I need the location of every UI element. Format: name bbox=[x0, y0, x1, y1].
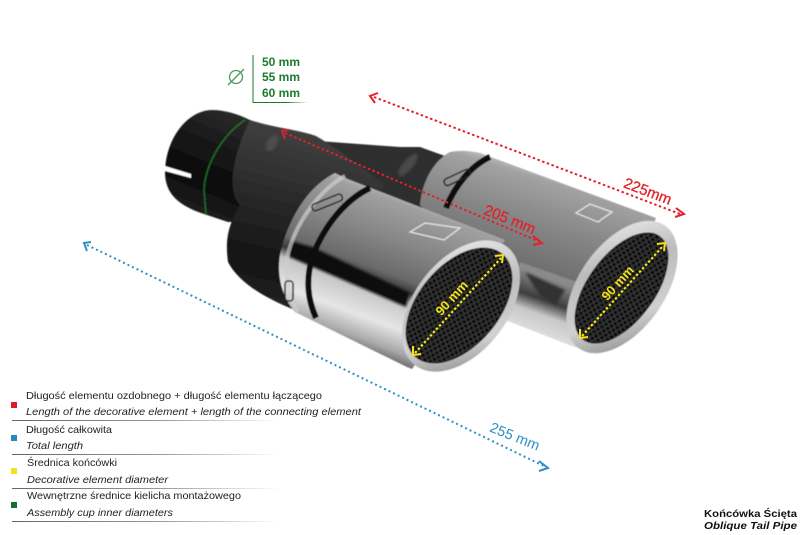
right cylinder lower section bbox=[505, 262, 600, 348]
legend: blue item: Total length bbox=[26, 440, 83, 452]
legend: yellow item: Średnica końcówki bbox=[27, 456, 117, 469]
diameter values: 60 mm bbox=[262, 88, 300, 100]
yellow arrow: right tip 90 mm bbox=[580, 243, 665, 338]
black inlet pipe bbox=[165, 110, 300, 222]
diameter values: 55 mm bbox=[262, 72, 300, 84]
left cylinder dark reflection band bbox=[288, 241, 410, 307]
product type caption: Oblique Tail Pipe bbox=[704, 520, 797, 532]
embossed logos bbox=[410, 204, 612, 240]
Y junction body bbox=[227, 120, 385, 310]
green inlet diameter callout bbox=[228, 55, 308, 102]
callout bracket bbox=[253, 55, 308, 102]
exhaust tail pipe product illustration bbox=[165, 110, 700, 394]
red arrow: 205 mm bbox=[282, 130, 542, 245]
legend: red item: Length of the decorative element + length of the connecting element bbox=[26, 406, 362, 418]
right tail cylinder bbox=[420, 151, 656, 345]
left tip rim bbox=[378, 218, 544, 394]
diameter symbol bbox=[228, 69, 244, 85]
right tip perforated insert bbox=[557, 217, 686, 359]
left tip perforated insert bbox=[385, 228, 533, 383]
legend: blue item bbox=[11, 424, 280, 455]
inlet pipe slot bbox=[165, 166, 191, 178]
legend: red item bbox=[11, 390, 362, 421]
yellow arrow: right tip 90 mm: 90 mm bbox=[598, 263, 637, 303]
legend bbox=[11, 390, 362, 522]
right cylinder black ring bbox=[446, 157, 490, 208]
brand badges on cylinders bbox=[285, 168, 471, 301]
yellow arrow: left tip 90 mm bbox=[413, 255, 503, 355]
diameter values: 50 mm bbox=[262, 57, 300, 69]
left cylinder light ring band bbox=[287, 176, 345, 312]
product type caption: Końcówka Ścięta bbox=[704, 507, 797, 520]
diameter values bbox=[262, 57, 300, 100]
left tail cylinder bbox=[279, 173, 505, 369]
blue arrow: 255 mm bbox=[84, 242, 548, 471]
red arrow: 205 mm: 205 mm bbox=[481, 202, 538, 238]
legend: green item: Wewnętrzne średnice kielicha montażowego bbox=[27, 490, 241, 502]
left cylinder black ring bbox=[308, 188, 370, 318]
right cylinder dark reflection bbox=[525, 272, 565, 305]
right tip rim bbox=[544, 201, 700, 373]
rear connecting tube bbox=[318, 141, 480, 240]
legend: blue item: Długość całkowita bbox=[26, 424, 112, 436]
legend: green item: Assembly cup inner diameters bbox=[26, 507, 174, 519]
blue arrow: 255 mm: 255 mm bbox=[487, 420, 542, 455]
legend: yellow item: Decorative element diameter bbox=[27, 474, 169, 486]
green diameter band on pipe bbox=[204, 120, 245, 215]
yellow arrow: left tip 90 mm: 90 mm bbox=[432, 278, 471, 318]
legend: red item: Długość elementu ozdobnego + długość elementu łączącego bbox=[26, 390, 322, 402]
legend: yellow item bbox=[11, 456, 280, 489]
weld texture on junction bbox=[263, 133, 421, 179]
product type caption bbox=[704, 507, 797, 532]
red arrow: 225mm: 225mm bbox=[621, 175, 674, 209]
red arrow: 225mm bbox=[370, 93, 684, 217]
legend: green item bbox=[11, 490, 280, 522]
